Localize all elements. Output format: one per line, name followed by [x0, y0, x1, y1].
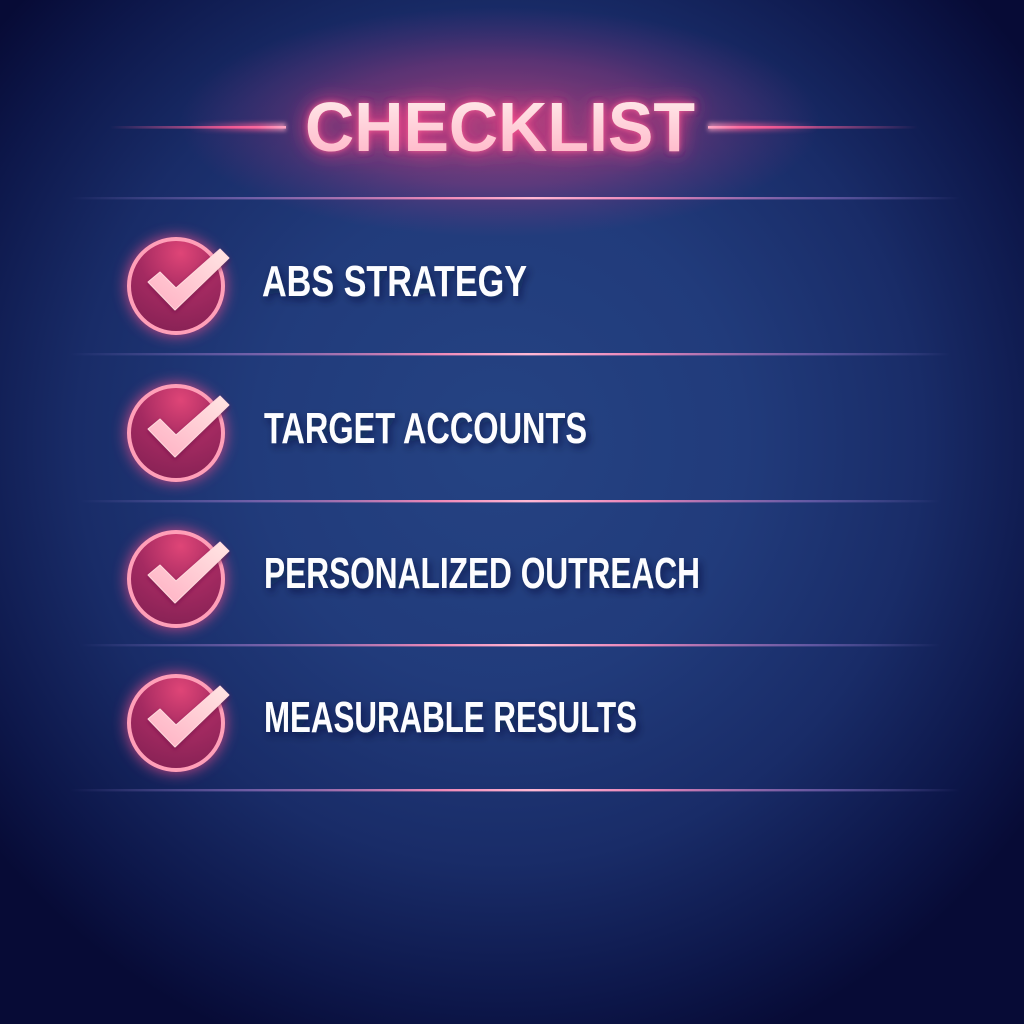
- title glow: [180, 7, 820, 237]
- icon: check circle 4: [126, 673, 229, 773]
- checklist item 3: [126, 529, 700, 629]
- label: ABS Strategy: ABS STRATEGY: [262, 257, 527, 306]
- title flare left: [110, 123, 286, 131]
- checklist item 2: [126, 383, 587, 483]
- icon: check circle 1: [126, 236, 229, 336]
- title flare right: [708, 123, 918, 131]
- checklist item 1: [126, 236, 527, 336]
- icon: check circle 3: [126, 529, 229, 629]
- divider 4: [80, 644, 940, 646]
- label: Target Accounts: TARGET ACCOUNTS: [264, 404, 587, 453]
- divider 5: [70, 789, 960, 791]
- title: CHECKLIST: [305, 88, 695, 166]
- label: Personalized Outreach: PERSONALIZED OUTREACH: [264, 549, 700, 598]
- label: Measurable Results: MEASURABLE RESULTS: [264, 693, 637, 742]
- icon: check circle 2: [126, 383, 229, 483]
- checklist item 4: [126, 673, 637, 773]
- divider 3: [80, 500, 940, 502]
- divider 2: [70, 353, 950, 355]
- divider 1: [70, 197, 960, 199]
